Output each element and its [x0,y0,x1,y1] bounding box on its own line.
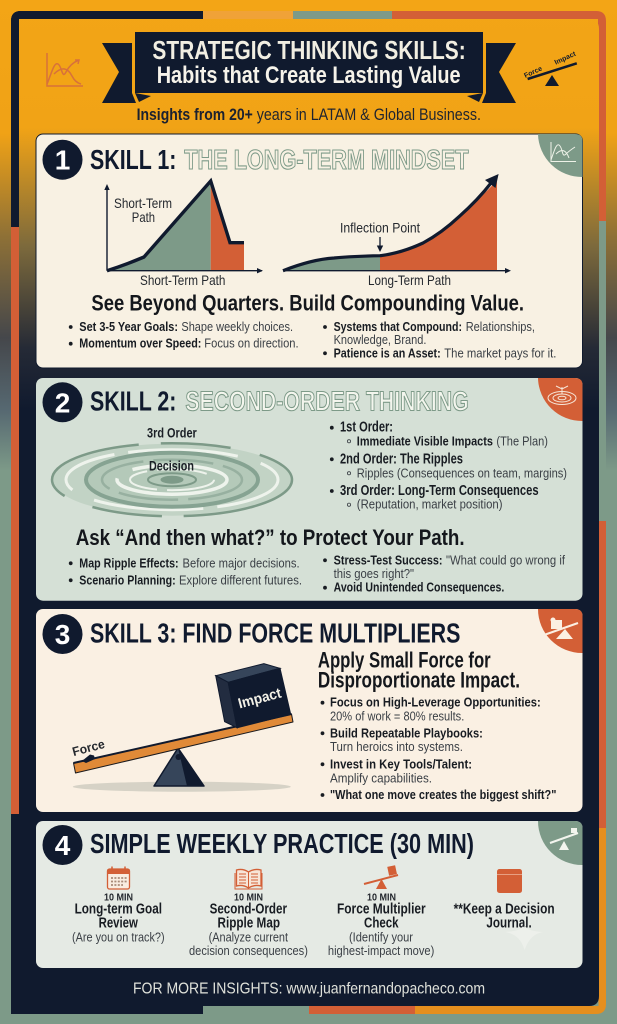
order list: Immediate Visible Impacts [357,433,493,448]
order list: 2nd Order: The Ripples [340,451,463,467]
corner badge: seesaw [538,609,582,653]
heading: skill 1: THE LONG-TERM MINDSET [184,144,469,175]
panel 4: simple weekly practice [36,821,582,968]
takeaway heading: Ask “And then what?” to Protect Your Path. [76,525,465,550]
chart label: short-term: Short-Term [114,195,172,211]
annotation: inflection point [340,220,420,252]
bullets [321,695,556,802]
practice: force multiplier check [328,865,434,958]
bullets left: Set 3-5 Year Goals: [79,319,178,334]
practice: long-term goal review [72,866,165,945]
label: 3rd order: 3rd Order [147,425,197,441]
fulcrum [154,748,204,786]
bullets right: Relationships, [466,319,535,334]
practice: second-order ripple map: Ripple Map [218,916,280,932]
heading: skill 2: SKILL 2: [90,386,176,417]
bullets left: Explore different futures. [179,572,302,587]
number badge 1: 1 [55,145,70,176]
impact box [216,664,291,728]
number badge 3: 3 [55,619,70,650]
corner badge: chart [538,134,582,177]
bullets left: Shape weekly choices. [181,319,293,334]
force marker: Force [71,737,106,759]
practice: long-term goal review: 10 MIN [104,891,133,903]
practice: force multiplier check: 10 MIN [367,891,396,903]
subtitle: years in LATAM & Global Business. [257,105,481,124]
impact box: Impact [237,686,283,712]
corner badge: ripples [538,378,582,421]
beam [74,714,293,773]
practice: long-term goal review: Long-term Goal [75,901,162,917]
practice: long-term goal review: Review [99,916,138,932]
icon: seesaw top right: Impact [554,50,578,67]
icon: journal [497,869,522,893]
bullets: Turn heroics into systems. [330,739,463,754]
decorative sparkle [505,926,543,950]
bullets right [323,552,565,595]
takeaway heading: Disproportionate Impact. [318,667,520,692]
practice: force multiplier check: Force Multiplier [337,901,426,917]
icon: calendar [108,866,130,889]
bullets left [69,319,299,351]
bullets right: Knowledge, Brand. [334,332,426,347]
practice: decision journal: Journal. [486,916,532,932]
bullets right: Systems that Compound: [334,319,462,334]
panel 2: second-order thinking [36,378,582,601]
order list: (Reputation, market position) [357,497,502,512]
bullets left: Before major decisions. [182,555,300,570]
annotation: inflection point: Inflection Point [340,220,420,236]
takeaway heading [318,647,520,692]
illustration: lever [71,664,293,792]
practice: force multiplier check: (Identify your [349,930,413,945]
icon: line chart top left [47,53,83,86]
practice: decision journal: **Keep a Decision [454,901,555,917]
number badge 4: 4 [55,830,71,861]
title line 1: STRATEGIC THINKING SKILLS: [152,35,466,65]
order list: 1st Order: [340,420,393,436]
bullets: Amplify capabilities. [330,770,432,785]
number badge 2: 2 [55,387,70,418]
practice: second-order ripple map: Second-Order [210,901,287,917]
label: decision: Decision [149,459,194,474]
order list: (The Plan) [496,433,548,448]
chart: short-term path [104,181,263,288]
number badge 1 [42,140,82,180]
bullets left: Focus on direction. [204,336,299,351]
practice: long-term goal review: (Are you on track?) [72,930,165,945]
bullets: Build Repeatable Playbooks: [330,725,483,740]
heading: skill 2 [90,386,469,417]
order list: Ripples (Consequences on team, margins) [357,465,567,480]
icon: seesaw top right: Force [523,65,544,80]
heading: skill 3: SKILL 3: FIND FORCE MULTIPLIERS [90,617,460,648]
bullets: Invest in Key Tools/Talent: [330,756,472,771]
order list: 3rd Order: Long-Term Consequences [340,483,539,499]
ribbon tails [102,43,516,103]
heading: weekly practice: SIMPLE WEEKLY PRACTICE (30 MIN) [90,828,474,859]
axis label: short-term path: Short-Term Path [140,272,225,288]
bullets: 20% of work = 80% results. [330,708,464,723]
icon: open book [235,869,262,889]
number badge 3 [42,614,82,654]
order list [330,420,567,512]
panel 1: the long-term mindset [36,134,582,368]
bullets right: "What could go wrong if [446,552,565,567]
bullets right: this goes right?" [334,566,414,581]
footer link: FOR MORE INSIGHTS: www.juanfernandopacheco.com [133,980,485,997]
bullets: "What one move creates the biggest shift?" [330,787,556,802]
bullets right: Avoid Unintended Consequences. [334,580,504,595]
bullets right: Patience is an Asset: [334,345,441,360]
practice: second-order ripple map: 10 MIN [234,891,263,903]
practice: force multiplier check: Check [364,916,399,932]
practice: second-order ripple map: (Analyze current [209,930,288,945]
practice: decision journal [454,869,555,932]
bullets right: Stress-Test Success: [334,552,442,567]
corner badge: seesaw [538,821,582,865]
panel 3: find force multipliers [36,609,582,812]
bullets left: Scenario Planning: [79,572,176,587]
bullets right [323,319,556,360]
practice: second-order ripple map: decision consequences) [189,943,308,958]
chart: long-term path [283,174,511,288]
bullets left [69,555,302,587]
title line 2: Habits that Create Lasting Value [157,62,461,89]
takeaway heading: Apply Small Force for [318,647,491,672]
heading: skill 1: SKILL 1: [90,144,176,175]
practice: force multiplier check: highest-impact move) [328,943,434,958]
bullets left: Map Ripple Effects: [79,555,179,570]
chart label: short-term: Path [132,209,155,225]
bullets left: Momentum over Speed: [79,336,201,351]
ripple diagram [52,443,292,516]
bullets: Focus on High-Leverage Opportunities: [330,695,541,710]
number badge 2 [42,382,82,422]
axis label: long-term path: Long-Term Path [368,272,451,288]
subtitle: Insights from 20+ [137,105,253,124]
title banner [102,32,516,103]
icon: seesaw top right [523,50,578,86]
takeaway heading: See Beyond Quarters. Build Compounding Value. [91,290,524,315]
bullets right: The market pays for it. [444,345,556,360]
subtitle [137,105,481,124]
heading: skill 1 [90,144,469,175]
chart label: short-term [114,195,172,225]
number badge 4 [42,825,82,865]
icon: seesaw with box [364,865,398,889]
heading: skill 2: SECOND-ORDER THINKING [185,386,469,417]
practice: second-order ripple map [189,869,308,958]
